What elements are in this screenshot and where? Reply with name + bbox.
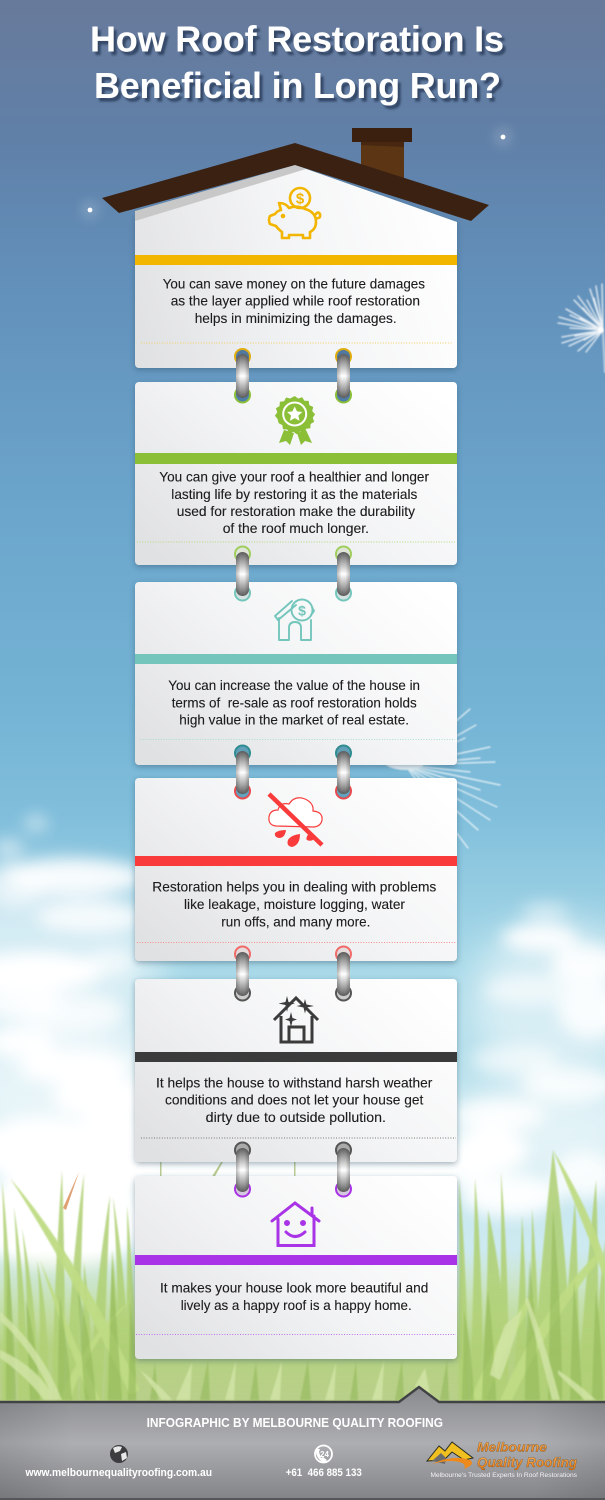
body text: dirty due to outside pollution.: [206, 1109, 386, 1125]
icon: house with dollar: [275, 600, 314, 640]
grass blades light: [0, 1298, 596, 1400]
body text: [156, 1074, 433, 1125]
colour band: [135, 255, 457, 265]
house shaped panel: [135, 165, 457, 368]
colour band: [135, 453, 457, 464]
dotted divider: [140, 738, 455, 740]
body text: It helps the house to withstand harsh weather: [156, 1074, 433, 1090]
body text: You can increase the value of the house in: [168, 677, 420, 693]
body text: conditions and does not let your house get: [165, 1092, 423, 1108]
body text: You can save money on the future damages: [163, 276, 425, 292]
footer edge shading: [0, 1403, 605, 1498]
card 4: leak protection: [135, 778, 457, 961]
icon: piggy bank with coin: $: [296, 190, 305, 208]
footer bottom line: [0, 1498, 605, 1500]
roof: [102, 143, 489, 221]
title: How Roof Restoration Is: [90, 18, 504, 60]
icon: smiling house: [272, 1203, 319, 1246]
card 6: happy home: [135, 1176, 457, 1359]
logo roof mark: [427, 1442, 473, 1469]
glowing star right: [493, 127, 513, 147]
long diagonal blades: [10, 1150, 605, 1400]
dotted divider: [136, 1334, 456, 1336]
panel: [135, 778, 457, 961]
logo tagline: Melbourne's Trusted Experts In Roof Restorations: [430, 1472, 578, 1479]
dandelion behind cards: [381, 709, 500, 848]
body text: It makes your house look more beautiful and: [160, 1280, 428, 1296]
body text: lively as a happy roof is a happy home.: [181, 1297, 412, 1313]
logo: [427, 1440, 578, 1479]
panel: [135, 1176, 457, 1359]
phone number: +61 466 885 133: [286, 1467, 362, 1479]
logo name: Melbourne: [477, 1440, 547, 1454]
body text: helps in minimizing the damages.: [195, 310, 397, 326]
colour band: [135, 1052, 457, 1062]
body text: [163, 276, 425, 326]
body text: You can give your roof a healthier and longer: [159, 469, 429, 485]
icon: globe: [110, 1445, 128, 1463]
card 2: longer life: [135, 382, 457, 565]
logo: Quality Roofing: [477, 1454, 577, 1470]
body text: like leakage, moisture logging, water: [184, 896, 405, 912]
icon: award rosette: [275, 396, 315, 445]
card 5: weather and pollution: [135, 979, 457, 1162]
body text: of the roof much longer.: [223, 520, 369, 536]
body text: used for restoration make the durability: [177, 503, 415, 519]
card 3: resale value: [135, 582, 457, 765]
clouds right: [110, 903, 605, 1217]
icon: house with sparkles: [274, 996, 318, 1042]
icon: 24 hour phone: 24: [320, 1450, 329, 1459]
colour band: [135, 654, 457, 664]
rings between card 3 and 4: [235, 746, 351, 798]
footer top line: [0, 1387, 605, 1402]
body text: terms of re-sale as roof restoration holds: [172, 694, 417, 710]
dotted divider: [137, 541, 455, 543]
panel: [135, 382, 457, 565]
small blades above last card: [160, 1160, 296, 1178]
body text: [160, 1280, 428, 1313]
colour band: [135, 856, 457, 866]
footer heading: INFOGRAPHIC BY MELBOURNE QUALITY ROOFING: [147, 1416, 443, 1430]
dandelion top right: [558, 284, 605, 372]
icon: piggy bank with coin: [269, 188, 320, 238]
colour band: [135, 1255, 457, 1265]
clouds left: [0, 815, 159, 1270]
rings between card 1 and 2: [235, 349, 351, 402]
title: Beneficial in Long Run?: [94, 65, 501, 106]
grass blades back: [2, 1150, 605, 1400]
body text: [152, 879, 436, 929]
cloud haze: [0, 870, 605, 1180]
icon: house with dollar: $: [298, 602, 306, 618]
chimney: [352, 128, 412, 179]
panel: [135, 582, 457, 765]
body text: as the layer applied while roof restoration: [171, 293, 420, 309]
footer panel with peak: [0, 1387, 605, 1499]
grass blades dark: [6, 1210, 603, 1400]
orange blade tip: [63, 1172, 79, 1210]
body text: Restoration helps you in dealing with problems: [152, 879, 436, 895]
dotted divider: [141, 1137, 456, 1139]
grass: [0, 1150, 605, 1401]
body text: run offs, and many more.: [221, 913, 370, 929]
panel: [135, 979, 457, 1162]
roof shadow: [135, 165, 306, 221]
title: [90, 18, 504, 106]
icon: crossed out rain cloud: [269, 794, 322, 847]
dotted divider: [137, 942, 456, 944]
grass base fill: [0, 1250, 605, 1401]
website: www.melbournequalityroofing.com.au: [25, 1467, 212, 1479]
glowing star left: [80, 200, 100, 220]
body text: high value in the market of real estate.: [179, 712, 409, 728]
icon: 24 hour phone: [315, 1446, 332, 1463]
body text: lasting life by restoring it as the materials: [171, 486, 417, 502]
card 1: save money: [102, 143, 489, 368]
rings between card 4 and 5: [235, 946, 351, 1000]
footer: [0, 1387, 605, 1500]
body text: [159, 469, 429, 536]
dotted divider: [141, 342, 453, 344]
rings between card 2 and 3: [235, 546, 351, 600]
rings between card 5 and 6: [235, 1142, 351, 1196]
body text: [168, 677, 420, 728]
